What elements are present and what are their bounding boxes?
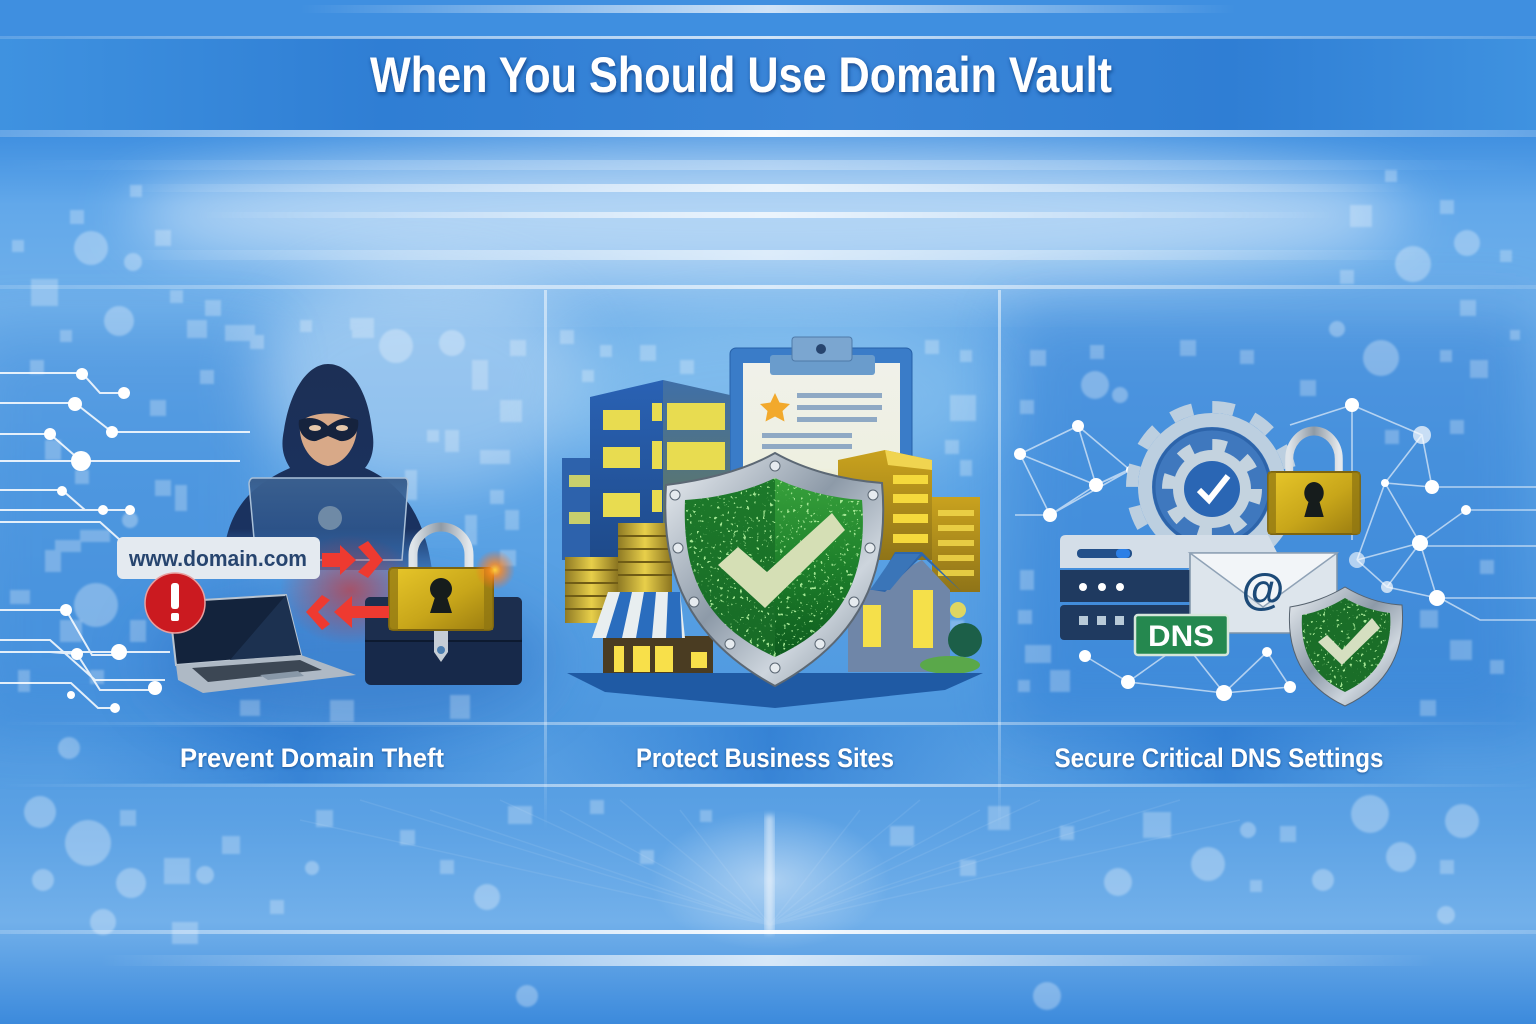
- caption: [550, 727, 990, 783]
- icon: spark: [475, 550, 515, 590]
- url bar: [117, 537, 320, 579]
- panel: protect business sites: [550, 337, 990, 783]
- icon: house: [848, 552, 982, 674]
- icon: buildings: [562, 380, 980, 623]
- rays: [300, 800, 1240, 925]
- icon: red glow: [280, 535, 420, 645]
- circuit lines left: [0, 373, 250, 708]
- panel: prevent domain theft: [0, 364, 540, 783]
- dns badge: [1135, 615, 1228, 655]
- caption: Protect Business Sites: [636, 743, 894, 773]
- icon: gold padlock: [389, 527, 493, 630]
- dns badge: DNS: [1148, 620, 1214, 653]
- icon: large shield: [665, 453, 883, 686]
- caption: [60, 727, 540, 783]
- icon: red arrows: [306, 541, 389, 630]
- panel dividers: [0, 290, 1536, 830]
- icon: gold padlock: [1268, 431, 1360, 534]
- url bar: www.domain.com: [128, 546, 307, 571]
- laptop screen behind: [249, 478, 408, 560]
- icon: hooded hacker: [222, 364, 432, 570]
- title: When You Should Use Domain Vault: [370, 47, 1112, 103]
- icon: gear: [1132, 407, 1292, 567]
- icon: small shield: [1289, 587, 1403, 706]
- base platform: [567, 673, 983, 708]
- panel: secure critical dns settings: [1005, 398, 1536, 783]
- network mesh: [1015, 405, 1536, 693]
- icon: envelope: @: [1242, 565, 1284, 614]
- icon: small laptop: [169, 595, 356, 693]
- icon: clipboard document: [730, 337, 912, 538]
- icon: briefcase: [365, 597, 522, 685]
- title banner: [0, 36, 1536, 137]
- caption: Secure Critical DNS Settings: [1054, 743, 1384, 773]
- icon: server: [1060, 535, 1285, 640]
- gold towers: [618, 523, 672, 595]
- icon: envelope: [1190, 553, 1337, 633]
- icon: alert: [145, 573, 205, 633]
- icon: storefront: [592, 592, 713, 676]
- right gold buildings: [932, 497, 980, 592]
- caption: [1005, 727, 1445, 783]
- caption: Prevent Domain Theft: [180, 743, 444, 773]
